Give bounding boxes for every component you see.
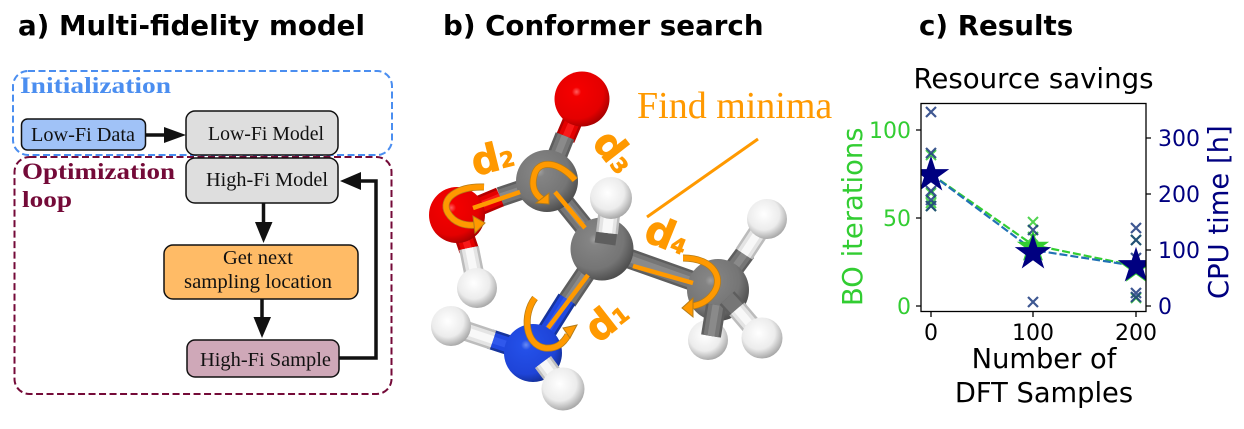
- atom: carbonyl oxygen: [554, 72, 610, 126]
- atom: carboxyl carbon: [516, 150, 578, 212]
- arrow: sampling to sample: [254, 299, 271, 338]
- rotation arrow d4: [682, 258, 718, 317]
- heading: Initialization: Initialization: [20, 73, 171, 98]
- atom: alpha hydrogen: [590, 177, 632, 219]
- panel: results chart: [838, 62, 1235, 409]
- axes frame and ticks: [916, 104, 1151, 317]
- plot markers and lines: [915, 107, 1152, 307]
- box: High-Fi Sample: High-Fi Sample: [200, 350, 331, 371]
- amine lower bond: [543, 362, 563, 389]
- pointer line from Find minima: [647, 139, 758, 217]
- x axis tick labels: 100: [1012, 321, 1054, 346]
- x axis tick labels: 0: [924, 321, 938, 346]
- right axis tick labels: [1158, 127, 1200, 320]
- green iteration samples: [926, 150, 1141, 303]
- atom: methyl carbon: [687, 259, 749, 321]
- left axis tick labels: 100: [869, 119, 911, 144]
- atom: amine hydrogen lower: [542, 368, 584, 410]
- box: Get next sampling location: Get next: [223, 248, 294, 269]
- atom: hydrogen on oxygen: [457, 268, 497, 308]
- arrow: data to low-fi model: [146, 127, 186, 143]
- left axis tick labels: 50: [883, 207, 911, 232]
- atom: amine hydrogen left: [431, 306, 471, 346]
- x axis label: Number of: [972, 344, 1116, 375]
- panel: molecule with dihedrals: [429, 72, 832, 410]
- label: d3: 3: [605, 153, 633, 179]
- left axis tick labels: [869, 119, 911, 320]
- heading: Optimization loop: loop: [22, 187, 72, 212]
- box: Low-Fi Model: Low-Fi Model: [208, 124, 325, 145]
- back bonds: [451, 99, 767, 353]
- optimization loop region: [14, 157, 392, 394]
- box: Get next sampling location: [164, 245, 358, 299]
- atom: hydrogen lower right: [742, 318, 782, 358]
- label: d2: 2: [497, 146, 517, 173]
- x axis tick labels: [924, 321, 1157, 346]
- label: d1: d: [576, 299, 626, 352]
- label: d2: d: [467, 135, 505, 186]
- right axis tick labels: 100: [1158, 239, 1200, 264]
- right axis tick labels: 300: [1158, 127, 1200, 152]
- heading: Optimization loop: [22, 159, 175, 212]
- title: a) Multi-fidelity model: a) Multi-fidelity model: [18, 9, 365, 42]
- initialization region: [13, 71, 392, 155]
- label: d3: d: [583, 121, 636, 171]
- label: Find minima: Find minima: [637, 85, 832, 127]
- left axis label: BO iterations: [838, 127, 869, 306]
- arrow: high-fi model to sampling: [255, 203, 272, 243]
- panel: multi-fidelity flowchart: [13, 71, 392, 394]
- box: Get next sampling location: sampling location: [184, 272, 332, 293]
- green trend line: [938, 178, 1122, 264]
- atom: hydrogen upper right: [747, 199, 787, 239]
- right axis tick labels: 200: [1158, 183, 1200, 208]
- x axis label: DFT Samples: [955, 378, 1133, 409]
- title: c) Results: c) Results: [919, 9, 1073, 42]
- heading: Optimization loop: Optimization: [22, 159, 175, 184]
- navy mean stars: [915, 158, 1152, 280]
- box: Low-Fi Model: [186, 111, 338, 155]
- rotation arrow d2: [446, 187, 485, 233]
- title: b) Conformer search: b) Conformer search: [443, 9, 764, 42]
- methyl front bonds: [711, 298, 760, 336]
- rotation arrow d1: [527, 298, 577, 348]
- box: Low-Fi Data: [22, 119, 146, 150]
- x axis tick labels: 200: [1115, 321, 1157, 346]
- right axis label: CPU time [h]: [1204, 125, 1235, 299]
- label: d4: 4: [667, 232, 690, 260]
- alpha hydrogen bond: [605, 198, 611, 244]
- atom: hydroxyl oxygen: [429, 187, 485, 243]
- atom: alpha carbon: [570, 218, 634, 280]
- green mean stars: [1017, 230, 1152, 282]
- box: High-Fi Sample: [187, 340, 339, 377]
- arrow: feedback loop to high-fi model: [339, 172, 376, 358]
- label: d1: 1: [608, 302, 634, 330]
- rotation arrow d3: [533, 164, 575, 204]
- dihedral axis lines: [473, 192, 693, 328]
- box: High-Fi Model: [186, 158, 338, 203]
- atom: amine nitrogen: [504, 324, 562, 382]
- box: Low-Fi Data: Low-Fi Data: [31, 125, 135, 146]
- label: d4: d: [638, 207, 682, 260]
- left axis tick labels: 0: [897, 295, 911, 320]
- atom: hydrogen lower back: [688, 320, 728, 360]
- box: High-Fi Model: High-Fi Model: [206, 170, 329, 191]
- chart title: Resource savings: [914, 62, 1153, 95]
- blue trend line: [939, 180, 1122, 265]
- blue CPU-time samples: [926, 107, 1141, 307]
- right axis tick labels: 0: [1158, 295, 1172, 320]
